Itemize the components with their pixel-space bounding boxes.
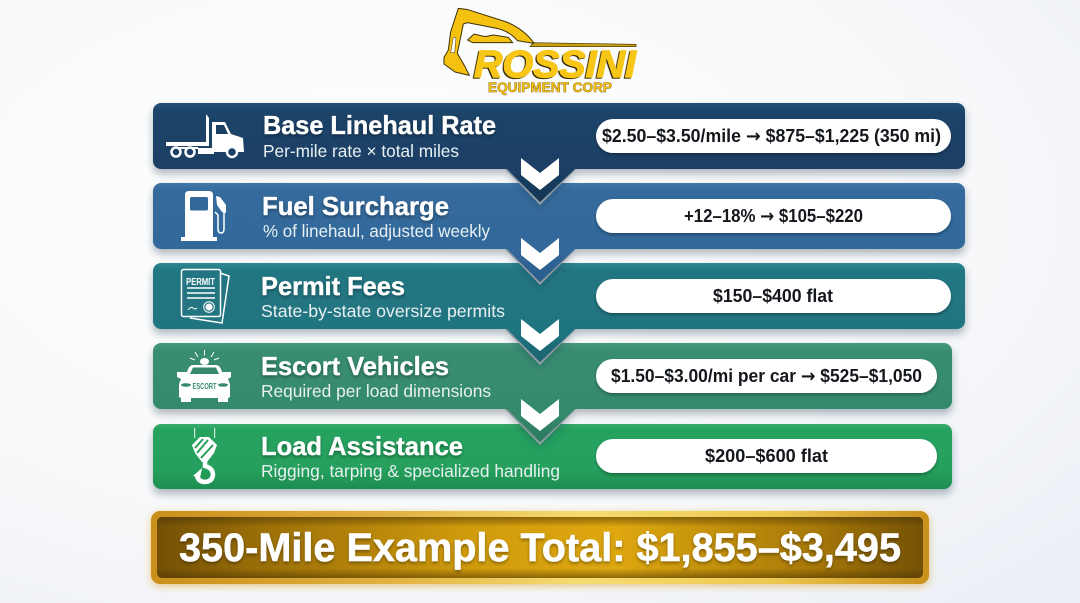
price pill — [596, 279, 951, 313]
logo: Rossini Equipment Corp — [444, 8, 637, 95]
icon: crane hook — [192, 428, 217, 482]
panel: escort vehicles — [153, 343, 952, 445]
heading: Base Linehaul Rate — [263, 110, 496, 140]
total text: 350-Mile Example Total: $1,855–$3,495 — [179, 526, 901, 570]
logo wordmark: ROSSINI — [474, 44, 637, 86]
heading: Fuel Surcharge — [262, 191, 449, 221]
price pill — [596, 439, 937, 473]
price pill — [596, 359, 937, 393]
icon: chevron — [521, 158, 559, 190]
price pill: $150–$400 flat — [713, 286, 833, 306]
total banner — [151, 511, 929, 584]
icon: permit document — [182, 270, 229, 323]
description: Rigging, tarping & specialized handling — [261, 461, 560, 481]
heading: Permit Fees — [261, 271, 405, 301]
icon: escort car: ESCORT — [192, 381, 217, 391]
icon: excavator arm — [444, 8, 636, 75]
heading: Load Assistance — [261, 431, 463, 461]
panel: fuel surcharge — [153, 183, 965, 285]
description: State-by-state oversize permits — [261, 301, 505, 321]
description: Per-mile rate × total miles — [263, 141, 459, 161]
price pill: $2.50–$3.50/mile → $875–$1,225 (350 mi) — [602, 126, 941, 147]
icon: escort car — [177, 350, 231, 402]
icon: chevron — [521, 399, 559, 431]
panel: base linehaul rate — [153, 103, 965, 205]
description: % of linehaul, adjusted weekly — [263, 221, 490, 241]
logo subtitle: EQUIPMENT CORP — [488, 79, 612, 95]
price pill — [596, 199, 951, 233]
price pill: $200–$600 flat — [705, 446, 828, 466]
price pill: +12–18% → $105–$220 — [684, 206, 863, 227]
icon: fuel pump — [181, 191, 226, 241]
description: Required per load dimensions — [261, 381, 491, 401]
panel: load assistance — [153, 424, 952, 489]
icon: chevron — [521, 319, 559, 351]
price pill: $1.50–$3.00/mi per car → $525–$1,050 — [611, 366, 922, 387]
icon: truck — [166, 114, 244, 157]
heading: Escort Vehicles — [261, 351, 449, 381]
panel: permit fees — [153, 263, 965, 365]
icon: chevron — [521, 238, 559, 270]
price pill — [596, 119, 951, 153]
icon: permit document: PERMIT — [186, 277, 215, 288]
